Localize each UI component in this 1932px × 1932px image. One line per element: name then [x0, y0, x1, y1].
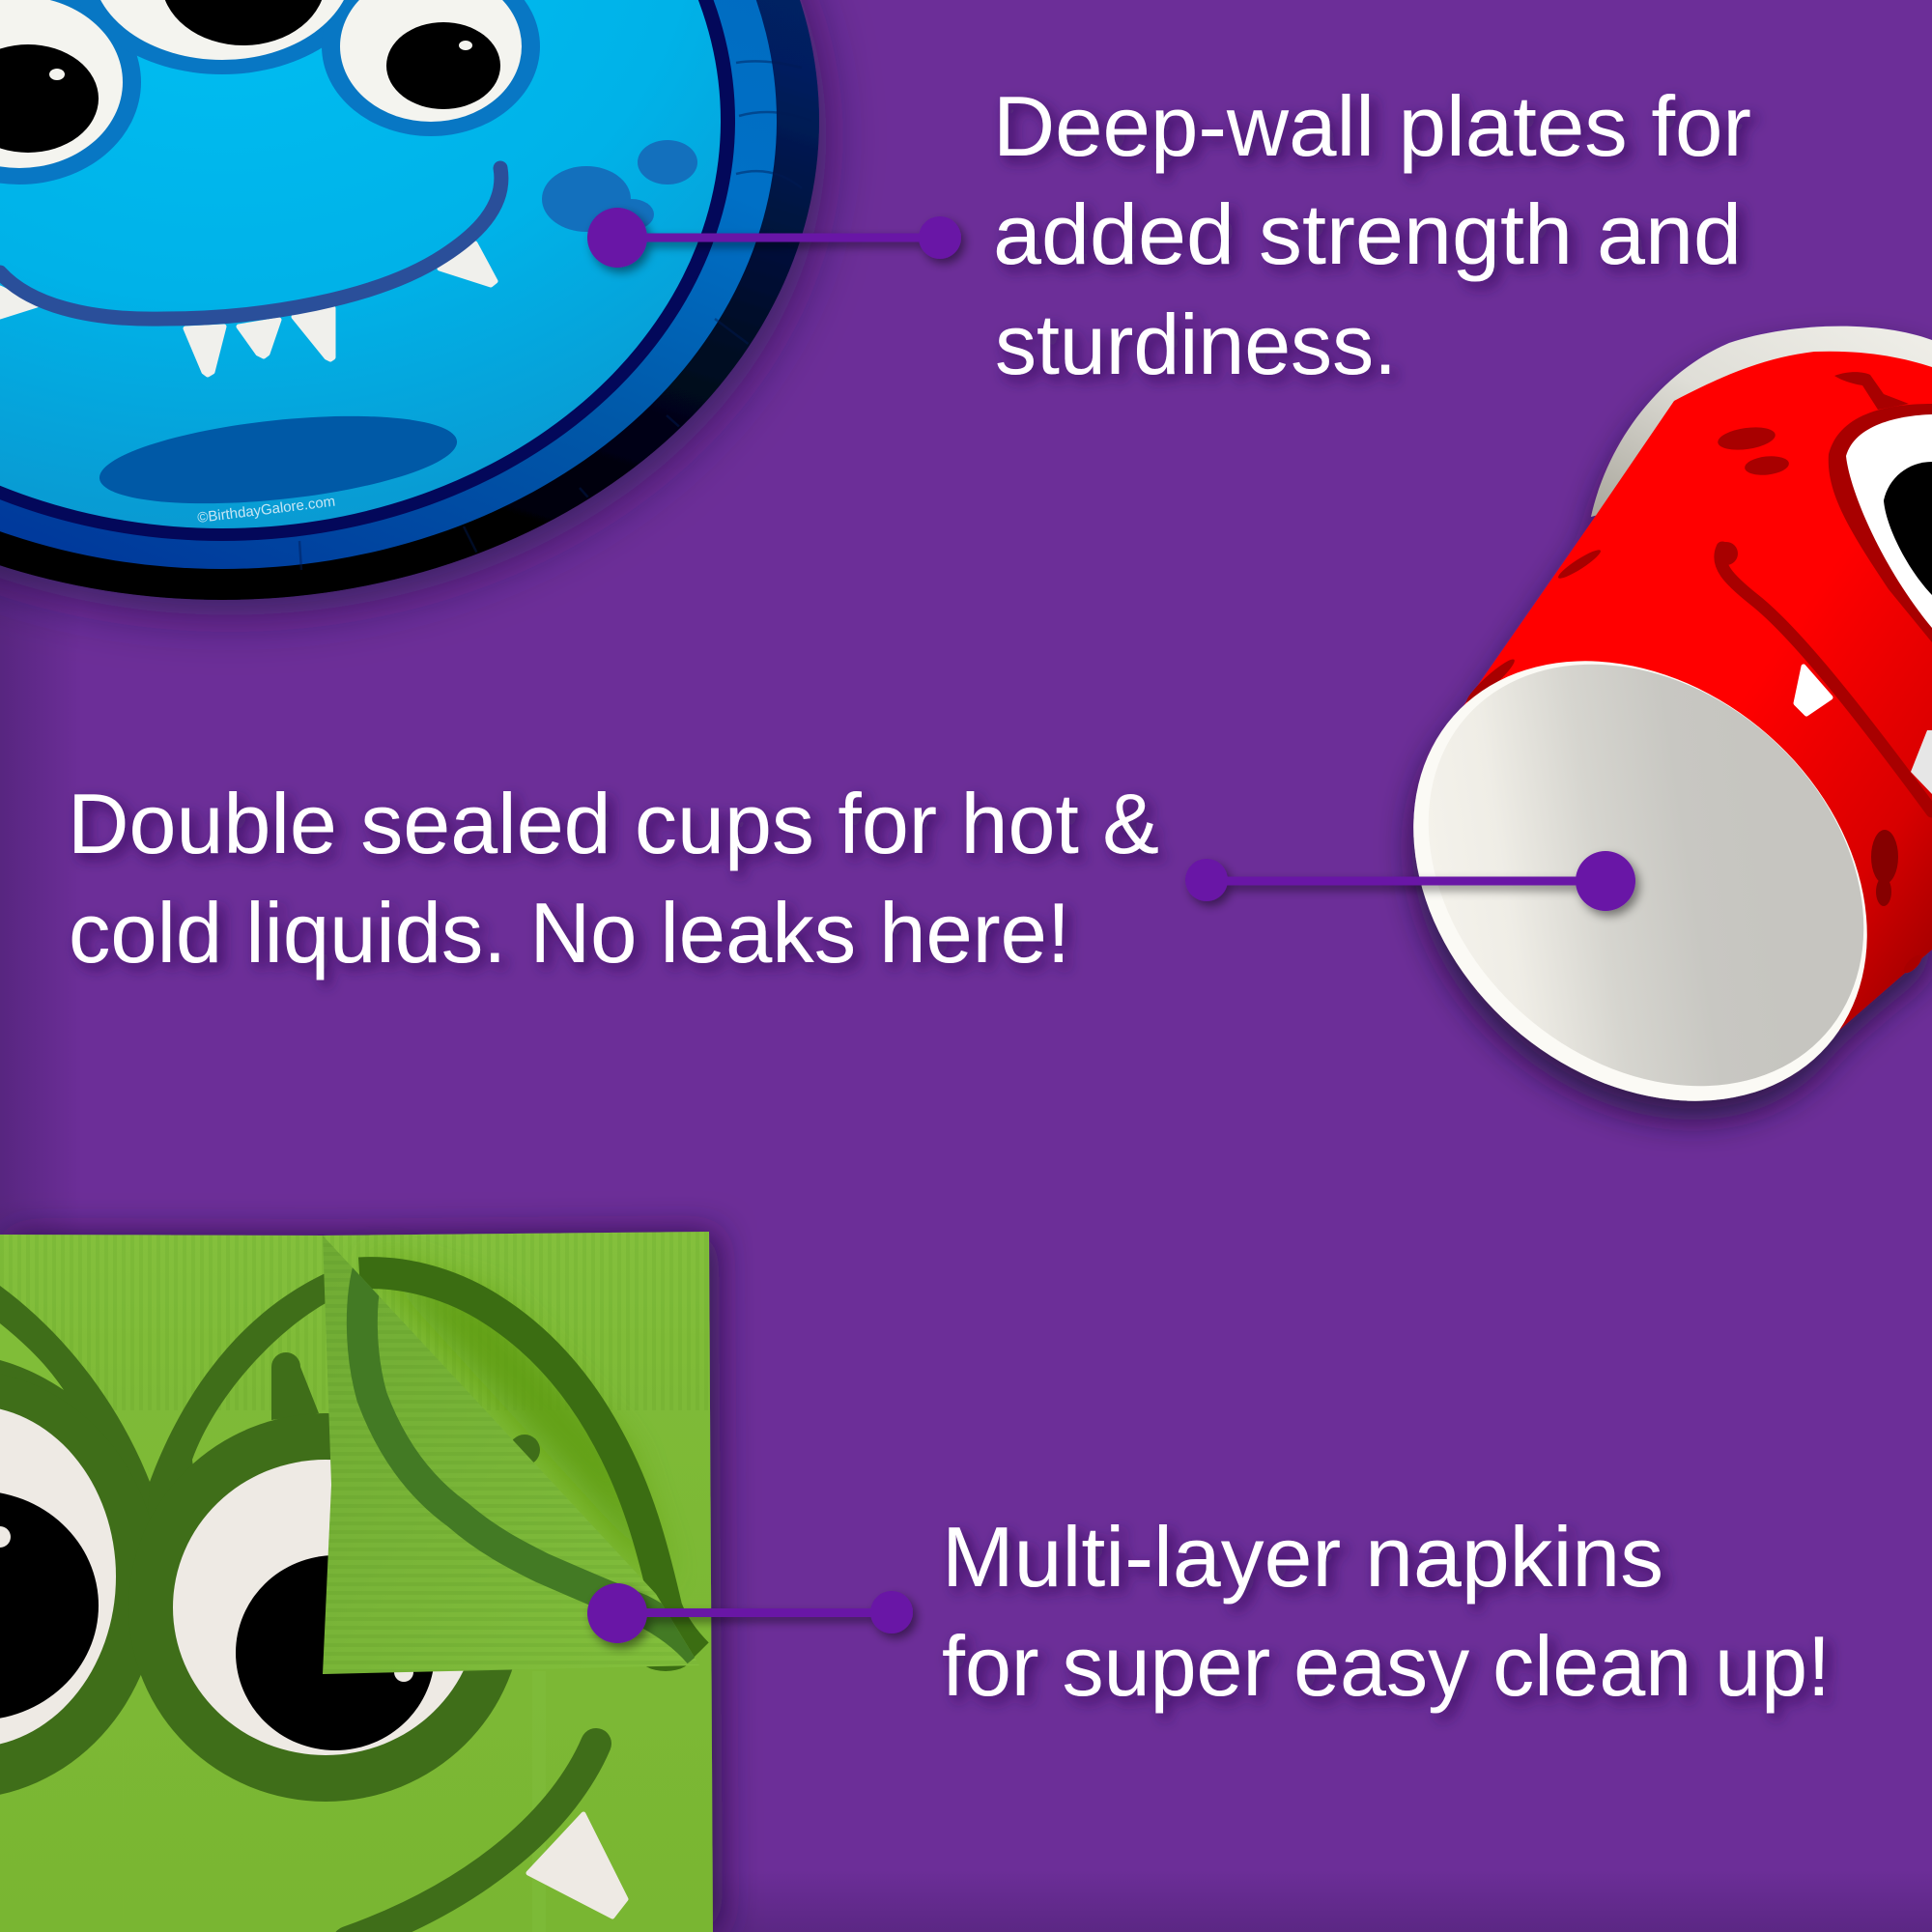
cup fangs: [1796, 667, 1932, 794]
napkin arc end loop: [639, 1640, 693, 1671]
text: napkin caption: [942, 1509, 1831, 1714]
napkin ribbing: [0, 1232, 711, 1410]
text: plate caption: added strength and: [993, 186, 1742, 282]
napkin right arc: [145, 1272, 327, 1565]
panel: green monster napkin: [0, 1232, 713, 1932]
plate rim creases: [299, 61, 811, 575]
napkin eye rings: [0, 1370, 523, 1802]
text: cup caption: cold liquids. No leaks here!: [69, 885, 1070, 980]
cup lower spots: [1871, 830, 1898, 906]
cup pupil: [1884, 462, 1932, 595]
connector: napkin: [587, 1583, 913, 1643]
plate lower mouth: [96, 402, 461, 518]
connector: plate: [587, 208, 961, 268]
plate watermark: ©BirthdayGalore.com: [196, 494, 336, 526]
cup antenna: [1834, 372, 1909, 410]
plate eye whites: [0, 0, 522, 168]
text: napkin caption: Multi-layer napkins: [942, 1509, 1663, 1605]
connector: cup: [1185, 851, 1635, 911]
napkin pupils: [0, 1491, 435, 1750]
cup eye ring: [1829, 404, 1932, 642]
plate navy ring: [0, 0, 735, 541]
napkin left arc: [0, 1286, 159, 1565]
napkin brow notch: [0, 1323, 64, 1390]
panel: red monster cup: [1325, 327, 1932, 1191]
cup base inner: [1344, 578, 1932, 1173]
plate smile: [0, 168, 501, 319]
napkin upper arc behind flap: [359, 1273, 697, 1654]
napkin folded flap: [323, 1236, 699, 1674]
plate outer rim: [0, 0, 819, 600]
panel: blue monster plate: [0, 0, 819, 600]
napkin eye whites: [0, 1406, 478, 1755]
plate blue band: [0, 0, 777, 569]
flap see-through arc: [362, 1265, 699, 1654]
cup base outer: [1325, 571, 1932, 1191]
text: plate caption: [993, 78, 1751, 392]
cup eye white: [1846, 414, 1932, 628]
cup rim: [1591, 327, 1932, 517]
napkin eye highlights: [0, 1526, 413, 1682]
text: cup caption: Double sealed cups for hot &: [68, 776, 1159, 871]
plate eye highlights: [49, 41, 472, 80]
plate face: [0, 0, 721, 528]
napkin lower fold: [532, 1671, 546, 1932]
napkin antenna: [271, 1352, 319, 1420]
text: plate caption: Deep-wall plates for: [993, 78, 1751, 174]
cup red body: [1452, 352, 1932, 1052]
shadow under flap: [367, 1256, 667, 1584]
plate teeth: [0, 243, 496, 375]
napkin fang: [528, 1814, 626, 1917]
napkin base: [0, 1232, 713, 1932]
text: napkin caption: for super easy clean up!: [942, 1618, 1831, 1714]
plate eye rings: [0, 0, 540, 185]
napkin smile: [348, 1744, 596, 1932]
napkin small dot: [509, 1435, 540, 1465]
plate cheek spots: [542, 140, 697, 232]
plate pupils: [0, 0, 500, 153]
cup smile: [1715, 542, 1932, 811]
text: plate caption: sturdiness.: [995, 297, 1397, 392]
cup spots: [1463, 424, 1924, 976]
text: cup caption: [68, 776, 1159, 980]
